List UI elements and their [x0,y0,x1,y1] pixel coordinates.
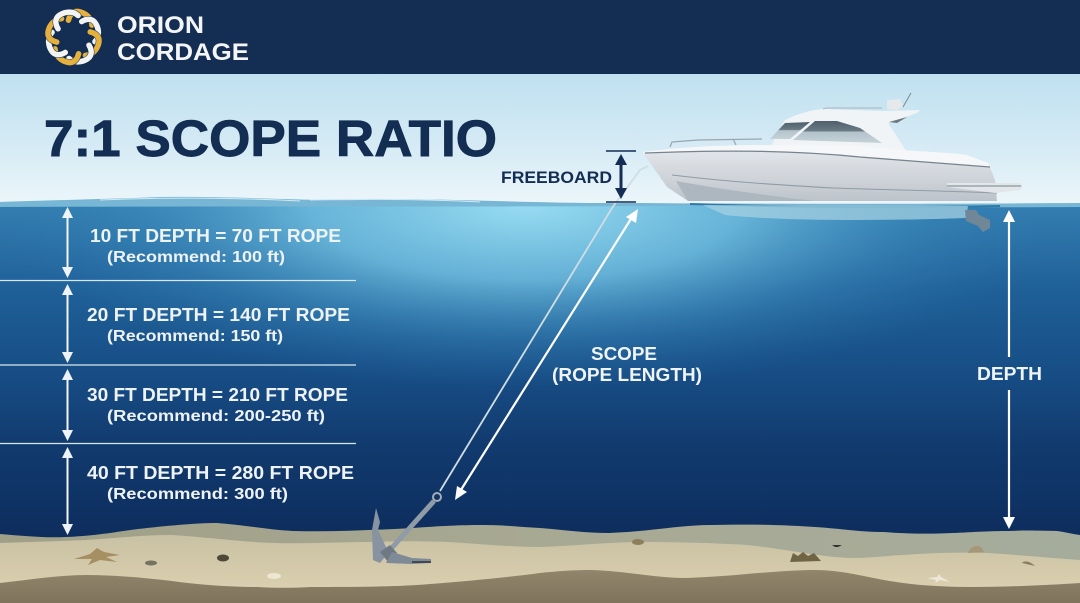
deck [643,145,992,170]
water surface line [0,197,1080,207]
rope [440,166,648,491]
hull chine [672,175,997,193]
freeboard measure arrow [606,151,636,202]
hardtop rail [823,108,882,109]
antenna [903,93,911,107]
scope label [552,344,702,385]
scope label: SCOPE [591,344,657,364]
windshield [770,122,810,139]
cabin and hardtop [770,109,920,156]
row: 20 ft: 20 FT DEPTH = 140 FT ROPE [87,305,350,325]
hardtop vent [889,117,907,123]
brand name: ORION [117,12,204,39]
boat [643,93,1023,232]
depth label: DEPTH [977,364,1042,384]
hull shadow [676,181,815,201]
seabed [0,523,1080,603]
scope label: (ROPE LENGTH) [552,365,702,385]
row: 20 ft: (Recommend: 150 ft) [107,328,283,345]
row: 40 ft [62,447,354,535]
row: 30 ft [62,369,348,441]
row: 10 ft: 10 FT DEPTH = 70 FT ROPE [90,226,341,246]
brand name: CORDAGE [117,39,249,66]
row: 40 ft: (Recommend: 300 ft) [107,486,288,503]
row: 40 ft: 40 FT DEPTH = 280 FT ROPE [87,463,354,483]
anchor [372,493,441,564]
header bar [0,0,1080,74]
brand name [117,12,249,66]
seabed decorations: starfish and shells [74,539,1035,583]
row: 10 ft [62,207,341,278]
logo: rope ring [43,7,104,67]
row dividers [0,280,356,444]
freeboard label: FREEBOARD [501,168,612,187]
swim platform [947,183,1023,193]
sky background [0,74,1080,209]
bow rail [670,139,762,147]
row: 30 ft: 30 FT DEPTH = 210 FT ROPE [87,385,348,405]
row: 10 ft: (Recommend: 100 ft) [107,249,285,266]
scope arrow [455,209,638,500]
row: 20 ft [62,284,350,363]
water background [0,206,1080,537]
row: 30 ft: (Recommend: 200-250 ft) [107,408,325,425]
hull stripe [645,151,990,167]
outboard motor [965,210,990,232]
hull [643,151,997,201]
depth arrow [1003,210,1015,529]
boat reflection [703,205,968,220]
side window [793,121,882,143]
title: 7:1 SCOPE RATIO [44,110,497,167]
radar dome [887,99,903,110]
